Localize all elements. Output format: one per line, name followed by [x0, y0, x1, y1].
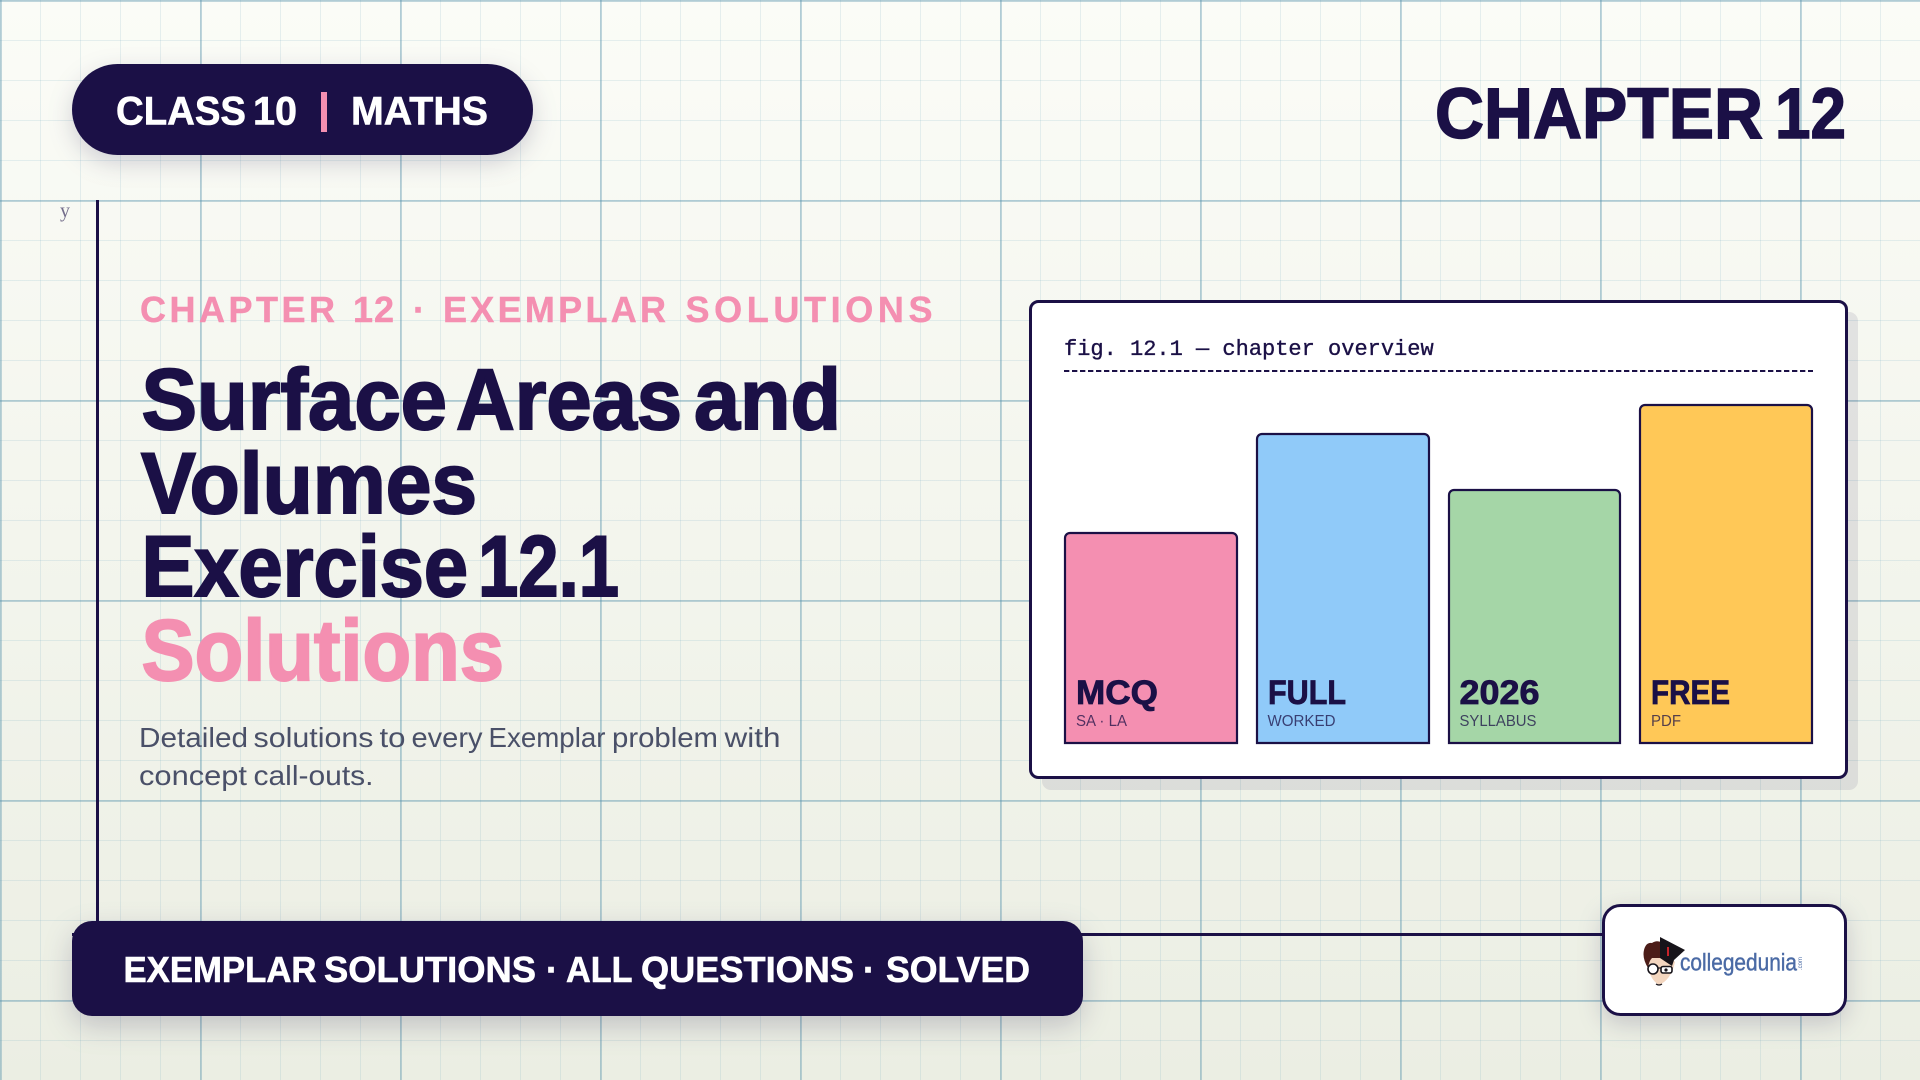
logo domain suffix: .com: [1798, 957, 1804, 970]
FREE bar shape: [1640, 405, 1812, 743]
dashed rule: [1064, 370, 1813, 372]
description line 1: Exemplar: [488, 722, 606, 753]
main title: [141, 352, 841, 699]
banner text: ·: [546, 949, 558, 990]
title line 2: Volumes: [141, 436, 477, 532]
FREE sublabel: PDF: [1651, 713, 1681, 730]
FULL bar shape: [1257, 434, 1429, 743]
bar: FREE: [1640, 405, 1812, 743]
banner text: ·: [863, 949, 875, 990]
class label: 10: [253, 90, 297, 134]
figure caption: fig. 12.1 — chapter overview: [1064, 337, 1434, 362]
pill background: [72, 64, 533, 155]
subject label: MATHS: [351, 90, 488, 134]
title line 3: 12.1: [478, 519, 619, 615]
chapter number heading: 12: [1775, 75, 1846, 154]
description line 1: problem: [612, 722, 718, 753]
eyebrow text: 12: [353, 289, 394, 330]
description paragraph: [139, 722, 780, 791]
2026 sublabel: SYLLABUS: [1460, 713, 1536, 730]
title line 1: and: [694, 352, 841, 448]
panel hard shadow: [1042, 312, 1858, 790]
figure panel: chapter overview: [1030, 302, 1858, 790]
eyebrow text: SOLUTIONS: [686, 289, 932, 330]
pink separator: [321, 92, 327, 132]
eyebrow text: EXEMPLAR: [443, 289, 666, 330]
title line 1: Areas: [456, 352, 682, 448]
description line 1: Detailed: [139, 722, 248, 753]
description line 1: to: [380, 722, 406, 753]
description line 2: [139, 760, 374, 791]
logo wordmark: collegedunia: [1680, 950, 1798, 976]
y axis line: [96, 200, 99, 935]
description line 2: call-outs.: [254, 760, 374, 791]
logo card background: [1604, 906, 1846, 1014]
MCQ label: MCQ: [1076, 674, 1158, 712]
MCQ bar shape: [1065, 533, 1237, 743]
bar: 2026: [1449, 490, 1620, 743]
class and subject pill: [72, 64, 533, 155]
eyebrow text: [140, 289, 932, 330]
x axis line: [72, 933, 1604, 936]
banner text: SOLUTIONS: [324, 949, 536, 990]
description line 1: solutions: [254, 722, 374, 753]
description line 1: [139, 722, 780, 753]
banner text: ALL: [566, 949, 632, 990]
2026 label: 2026: [1460, 674, 1540, 712]
FULL sublabel: WORKED: [1268, 713, 1336, 730]
eyebrow text: CHAPTER: [140, 289, 335, 330]
icon: graduate mascot: [1644, 937, 1685, 985]
bar: MCQ: [1065, 533, 1237, 743]
eyebrow text: ·: [413, 289, 425, 330]
title line 1: [142, 352, 841, 448]
MCQ sublabel: SA · LA: [1076, 713, 1128, 730]
class label: CLASS: [116, 90, 246, 134]
banner text: EXEMPLAR: [124, 949, 316, 990]
banner text: QUESTIONS: [641, 949, 854, 990]
banner text: [124, 949, 1030, 990]
panel card: [1030, 302, 1846, 778]
bottom banner: [72, 921, 1083, 1016]
banner text: SOLVED: [886, 949, 1030, 990]
2026 bar shape: [1449, 490, 1620, 743]
banner background: [72, 921, 1083, 1016]
title line 4: Solutions: [142, 603, 504, 699]
chapter number heading: CHAPTER: [1435, 75, 1763, 154]
description line 2: concept: [139, 760, 247, 791]
y axis label: y: [60, 200, 70, 222]
description line 1: every: [412, 722, 482, 753]
title line 3: Exercise: [142, 519, 468, 615]
bar: FULL: [1257, 434, 1429, 743]
FREE label: FREE: [1651, 674, 1730, 712]
FULL label: FULL: [1268, 674, 1346, 712]
description line 1: with: [723, 722, 780, 753]
title line 1: Surface: [142, 352, 447, 448]
logo card: [1604, 906, 1846, 1014]
